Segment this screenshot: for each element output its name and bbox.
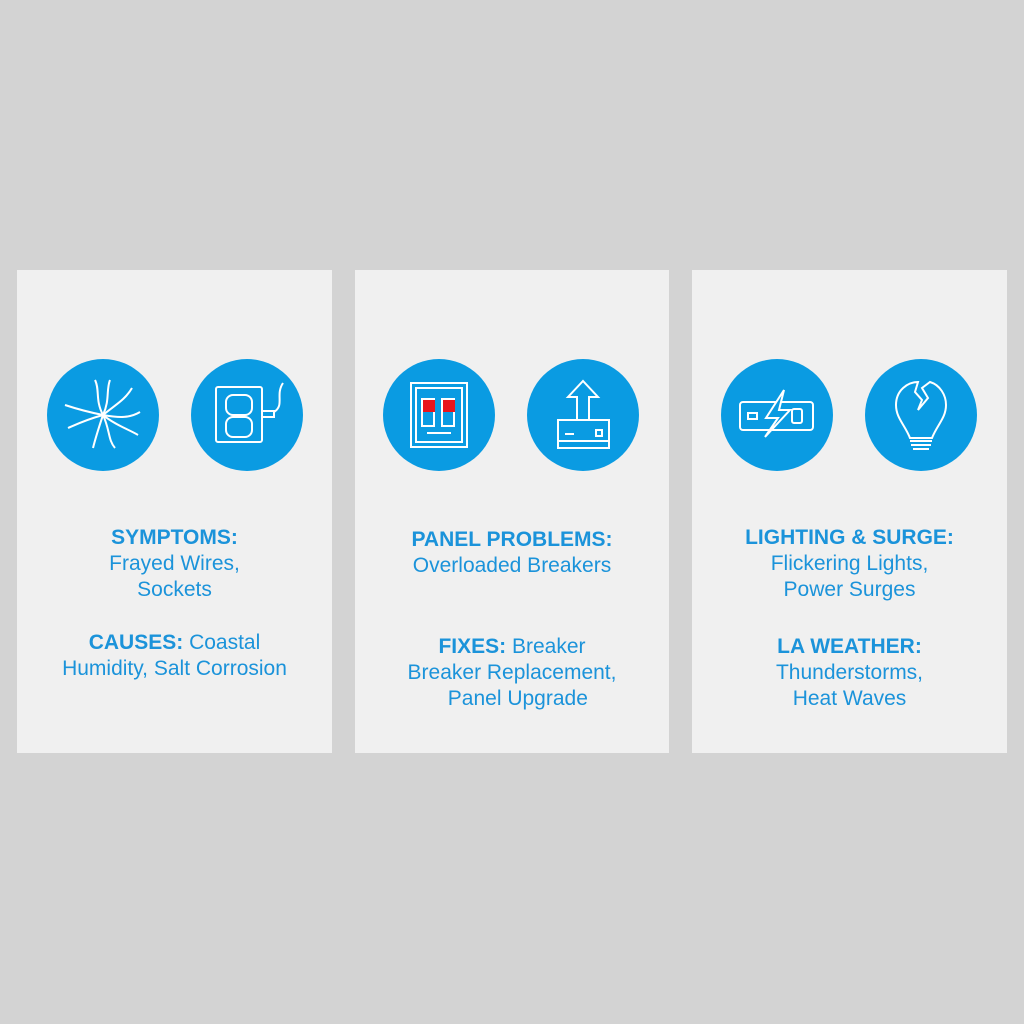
icon: frayed wires <box>47 359 159 471</box>
text: fixes: Breaker Replacement, <box>408 661 616 684</box>
text: la weather: LA WEATHER: <box>777 635 922 658</box>
text: fixes: FIXES: Breaker <box>438 635 586 658</box>
text: causes: CAUSES: Coastal <box>89 631 260 654</box>
icon: broken bulb <box>865 359 977 471</box>
text: lighting & surge <box>745 526 954 601</box>
text: fixes <box>408 635 616 710</box>
text: causes <box>62 631 287 680</box>
icon: upgrade arrow <box>527 359 639 471</box>
text: panel problems <box>411 528 613 577</box>
text: symptoms: Sockets <box>137 578 212 601</box>
panel: symptoms <box>17 270 332 753</box>
text: causes: Humidity, Salt Corrosion <box>62 657 287 680</box>
text: la weather <box>776 635 923 710</box>
text: lighting & surge: Power Surges <box>784 578 915 601</box>
text: symptoms <box>109 526 240 601</box>
text: panel problems: PANEL PROBLEMS: <box>411 528 613 551</box>
text: symptoms: Frayed Wires, <box>109 552 240 575</box>
icon: surge <box>721 359 833 471</box>
panel: lighting & surge <box>692 270 1007 753</box>
icon: breaker panel <box>383 359 495 471</box>
panel: panel problems <box>355 270 669 753</box>
text: lighting & surge: LIGHTING & SURGE: <box>745 526 954 549</box>
icon: outlet <box>191 359 303 471</box>
text: fixes: Panel Upgrade <box>448 687 588 710</box>
icons: frayed wires and socket <box>47 359 303 471</box>
text: symptoms: SYMPTOMS: <box>111 526 238 549</box>
text: lighting & surge: Flickering Lights, <box>771 552 928 575</box>
text: la weather: Thunderstorms, <box>776 661 923 684</box>
text: la weather: Heat Waves <box>793 687 906 710</box>
text: panel problems: Overloaded Breakers <box>413 554 611 577</box>
